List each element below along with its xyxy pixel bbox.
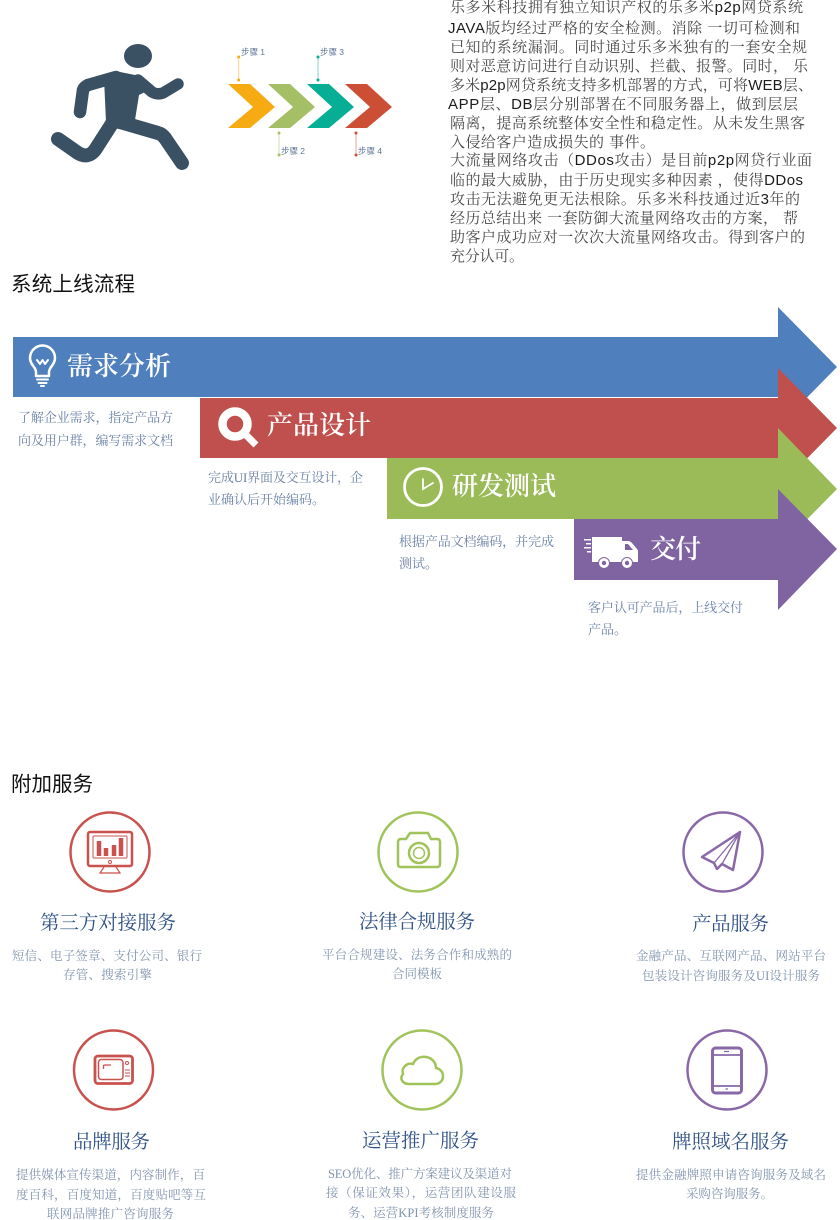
description: SEO优化、推广方案建议及渠道对 xyxy=(328,1166,512,1181)
description xyxy=(636,1167,826,1201)
label: 需求分析 xyxy=(67,352,171,381)
heading: additional services: 附加服务 xyxy=(11,773,93,796)
description: 务、运营KPI考核制度服务 xyxy=(348,1205,494,1220)
panel: legal compliance service xyxy=(322,812,512,981)
panel: operations promotion service xyxy=(326,1030,516,1220)
description: delivery xyxy=(588,600,743,637)
icon: running person xyxy=(58,44,182,163)
text block: security description: 多米p2p网贷系统支持多机部署的方式，可将WEB层、 xyxy=(450,76,813,94)
description: 短信、电子签章、支付公司、银行 xyxy=(12,948,202,963)
step 2: 步骤 2 xyxy=(281,146,305,156)
description xyxy=(636,948,826,983)
label: 交付 xyxy=(650,535,701,564)
title: 品牌服务 xyxy=(73,1131,150,1153)
step 1 xyxy=(228,47,275,128)
text block: security description: JAVA版均经过严格的安全检测。消除 一切可检测和 xyxy=(448,19,800,37)
arrow: requirements analysis xyxy=(13,307,837,427)
title: 牌照域名服务 xyxy=(672,1131,789,1153)
step 4 xyxy=(345,84,392,156)
text block: security description xyxy=(448,0,813,265)
text block: security description: 经历总结出来 一套防御大流量网络攻击的方案， 帮 xyxy=(450,210,798,227)
text block: security description: 已知的系统漏洞。同时通过乐多米独有的一套安全规 xyxy=(450,39,807,56)
description: 金融产品、互联网产品、网站平台 xyxy=(636,948,826,963)
text block: security description: 攻击无法避免更无法根除。乐多米科技通过近3年的 xyxy=(450,190,800,208)
icon: paper plane xyxy=(684,812,762,892)
description: 度百科，百度知道，百度贴吧等互 xyxy=(16,1187,206,1202)
description: 提供金融牌照申请咨询服务及域名 xyxy=(636,1167,826,1182)
panel: brand service xyxy=(16,1030,206,1220)
description: 存管、搜索引擎 xyxy=(63,967,152,982)
chart: four-step chevrons xyxy=(228,47,392,156)
text block: security description: 大流量网络攻击（DDos攻击）是目前p2p网贷行业面 xyxy=(450,151,812,169)
description: 平台合规建设、法务合作和成熟的 xyxy=(322,947,512,962)
text block: security description: 临的最大威胁，由于历史现实多种因素 ，使得DDos xyxy=(450,172,803,189)
description: 包装设计咨询服务及UI设计服务 xyxy=(642,968,820,983)
panel: product service xyxy=(636,812,826,983)
text block: security description: 充分认可。 xyxy=(450,248,524,265)
description: requirements analysis xyxy=(18,410,173,449)
text block: security description: APP层、DB层分别部署在不同服务器上，做到层层 xyxy=(448,96,798,113)
step 4: 步骤 4 xyxy=(358,146,382,156)
title: 法律合规服务 xyxy=(359,911,475,933)
title: 产品服务 xyxy=(692,913,769,935)
title: 运营推广服务 xyxy=(362,1130,479,1152)
icon: tablet xyxy=(688,1030,766,1110)
icon: camera xyxy=(378,812,458,892)
description: 采购咨询服务。 xyxy=(686,1186,773,1201)
description xyxy=(12,948,202,982)
description: product design xyxy=(208,470,363,507)
description: delivery: 产品。 xyxy=(588,622,627,637)
text block: security description: 助客户成功应对一次次大流量网络攻击。得到客户的 xyxy=(450,229,805,246)
arrow: development and testing xyxy=(387,428,837,549)
icon: delivery truck xyxy=(584,537,638,568)
panel: third-party integration service xyxy=(12,812,202,982)
description xyxy=(16,1167,206,1220)
description: product design: 业确认后开始编码。 xyxy=(208,492,325,507)
description: requirements analysis: 了解企业需求，指定产品方 xyxy=(18,410,173,426)
description: delivery: 客户认可产品后，上线交付 xyxy=(588,600,743,616)
step 3 xyxy=(307,47,354,128)
label: 产品设计 xyxy=(267,411,371,440)
arrow: delivery xyxy=(574,489,837,610)
description: development and testing: 根据产品文档编码，并完成 xyxy=(399,534,554,550)
text block: security description: 入侵给客户造成损失的 事件。 xyxy=(450,134,655,151)
icon: magnifier xyxy=(222,412,256,445)
panel: license and domain service xyxy=(636,1030,826,1201)
arrow: product design xyxy=(200,368,837,488)
icon: light bulb xyxy=(30,346,55,386)
step 3: 步骤 3 xyxy=(320,47,344,57)
description: requirements analysis: 向及用户群，编写需求文档 xyxy=(18,433,173,449)
description: 提供媒体宣传渠道，内容制作，百 xyxy=(16,1167,205,1182)
description: development and testing xyxy=(399,534,554,571)
step 2 xyxy=(268,84,315,156)
title: 第三方对接服务 xyxy=(40,912,176,934)
label: 研发测试 xyxy=(452,472,556,501)
description xyxy=(326,1166,516,1220)
description xyxy=(322,947,512,981)
description: 接（保证效果），运营团队建设服 xyxy=(326,1185,516,1200)
text block: security description: 隔离，提高系统整体安全性和稳定性。从未发生黑客 xyxy=(450,114,805,132)
description: product design: 完成UI界面及交互设计，企 xyxy=(208,470,363,486)
icon: television xyxy=(74,1030,153,1110)
text block: security description: 则对恶意访问进行自动识别、拦截、报警。同时， 乐 xyxy=(450,57,809,75)
heading: launch process: 系统上线流程 xyxy=(11,273,135,296)
icon: monitor with chart xyxy=(70,812,150,892)
icon: clock xyxy=(404,468,442,506)
description: development and testing: 测试。 xyxy=(399,556,438,571)
description: 合同模板 xyxy=(392,966,442,981)
step 1: 步骤 1 xyxy=(241,47,265,57)
icon: cloud xyxy=(382,1030,462,1110)
